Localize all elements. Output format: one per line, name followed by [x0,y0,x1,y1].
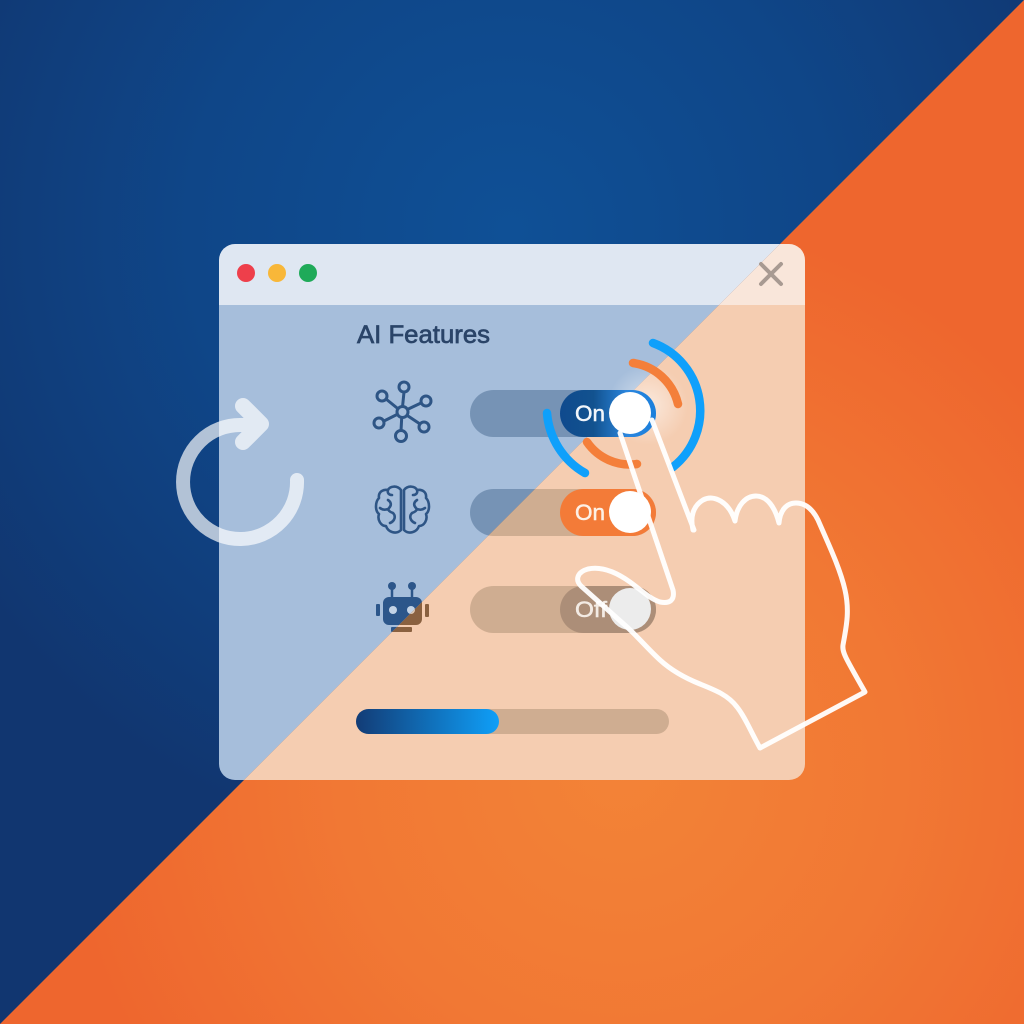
toggle row 1: track [470,390,637,437]
progress bar [356,709,669,734]
ripple rings around touch point [547,343,700,473]
touch glow [608,365,688,445]
progress track [356,709,669,734]
icon: pointing hand outline [578,420,865,748]
icon: refresh arrow [183,406,297,539]
icon: close X [761,264,781,284]
progress fill [356,709,499,734]
window header bar [219,244,805,305]
toggle 3: Off, muted [560,586,656,633]
toggle 2: On, orange [560,489,656,536]
icon: brain [376,487,429,533]
window control: red dot [237,264,255,282]
icon: robot [376,582,429,632]
toggle 3: Off, muted: Off [575,597,608,622]
ring: outer blue lower arc [547,413,585,473]
window control: green dot [299,264,317,282]
toggle row 3: track [470,586,656,633]
ring: inner orange lower arc [587,442,637,464]
ring: outer blue upper arc [653,343,700,467]
toggle 2: On, orange: On [575,500,605,525]
icon: network nodes [374,382,431,442]
toggle 1: On, blue: On [575,401,605,426]
panel: app window [219,244,805,780]
ring: inner orange upper arc [633,363,678,404]
heading: AI Features: AI Features [357,321,490,349]
window control: yellow dot [268,264,286,282]
window body [219,305,805,780]
toggle 1: On, blue [560,390,656,437]
toggle row 2: track [470,489,656,536]
